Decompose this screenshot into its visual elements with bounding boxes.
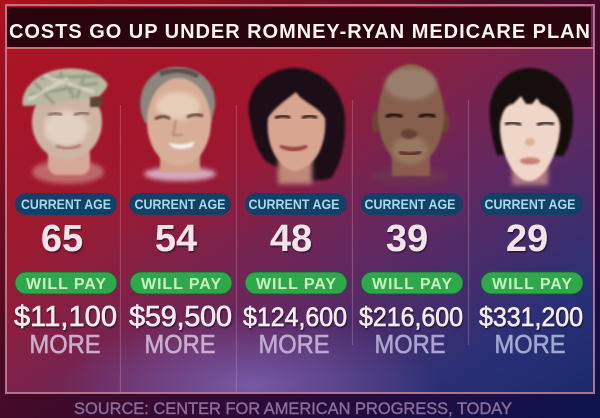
current age pill: CURRENT AGE: [134, 196, 226, 212]
current age pill: CURRENT AGE: [364, 196, 456, 212]
portrait: young woman with black bob: [489, 68, 573, 185]
portrait: bald man: [372, 64, 449, 186]
column 1: age 65: [14, 193, 117, 359]
column 5: age 29: [479, 193, 583, 359]
current age pill: [129, 193, 231, 215]
more label: MORE: [258, 329, 330, 359]
current age pill: [15, 193, 117, 215]
amount: $59,500: [129, 301, 232, 333]
amount: $331,200: [479, 302, 583, 332]
column 2: age 54: [129, 193, 232, 359]
title: COSTS GO UP UNDER ROMNEY-RYAN MEDICARE PLAN: [9, 21, 590, 43]
current age pill: CURRENT AGE: [248, 196, 340, 212]
current age pill: [481, 193, 583, 215]
more label: MORE: [374, 329, 446, 359]
will pay pill: [15, 272, 117, 294]
current age pill: CURRENT AGE: [21, 196, 111, 212]
will pay pill: WILL PAY: [492, 276, 572, 293]
portrait: grey-haired man: [140, 67, 216, 181]
age number: 54: [155, 218, 197, 260]
amount: $124,600: [243, 302, 347, 332]
amount: $216,600: [359, 302, 463, 332]
will pay pill: WILL PAY: [141, 276, 221, 293]
current age pill: [361, 193, 463, 215]
title bar: [7, 7, 593, 49]
current age pill: CURRENT AGE: [484, 196, 576, 212]
more label: MORE: [30, 329, 100, 359]
will pay pill: [481, 272, 583, 294]
age number: 39: [386, 218, 428, 260]
more label: MORE: [494, 329, 566, 359]
portrait: older man with plaid cap: [22, 69, 107, 184]
will pay pill: [130, 272, 232, 294]
column dividers: [120, 100, 468, 392]
age number: 48: [270, 218, 312, 260]
source line: SOURCE: CENTER FOR AMERICAN PROGRESS, TODAY: [74, 399, 512, 418]
age number: 65: [41, 218, 83, 260]
column 4: age 39: [359, 193, 463, 359]
column 3: age 48: [243, 193, 347, 359]
more label: MORE: [144, 329, 216, 359]
will pay pill: WILL PAY: [256, 276, 336, 293]
will pay pill: [245, 272, 347, 294]
portrait: woman with dark hair: [249, 68, 345, 184]
will pay pill: [361, 272, 463, 294]
will pay pill: WILL PAY: [26, 276, 106, 293]
current age pill: [245, 193, 347, 215]
age number: 29: [506, 218, 548, 260]
amount: $11,100: [14, 301, 117, 333]
will pay pill: WILL PAY: [372, 276, 452, 293]
